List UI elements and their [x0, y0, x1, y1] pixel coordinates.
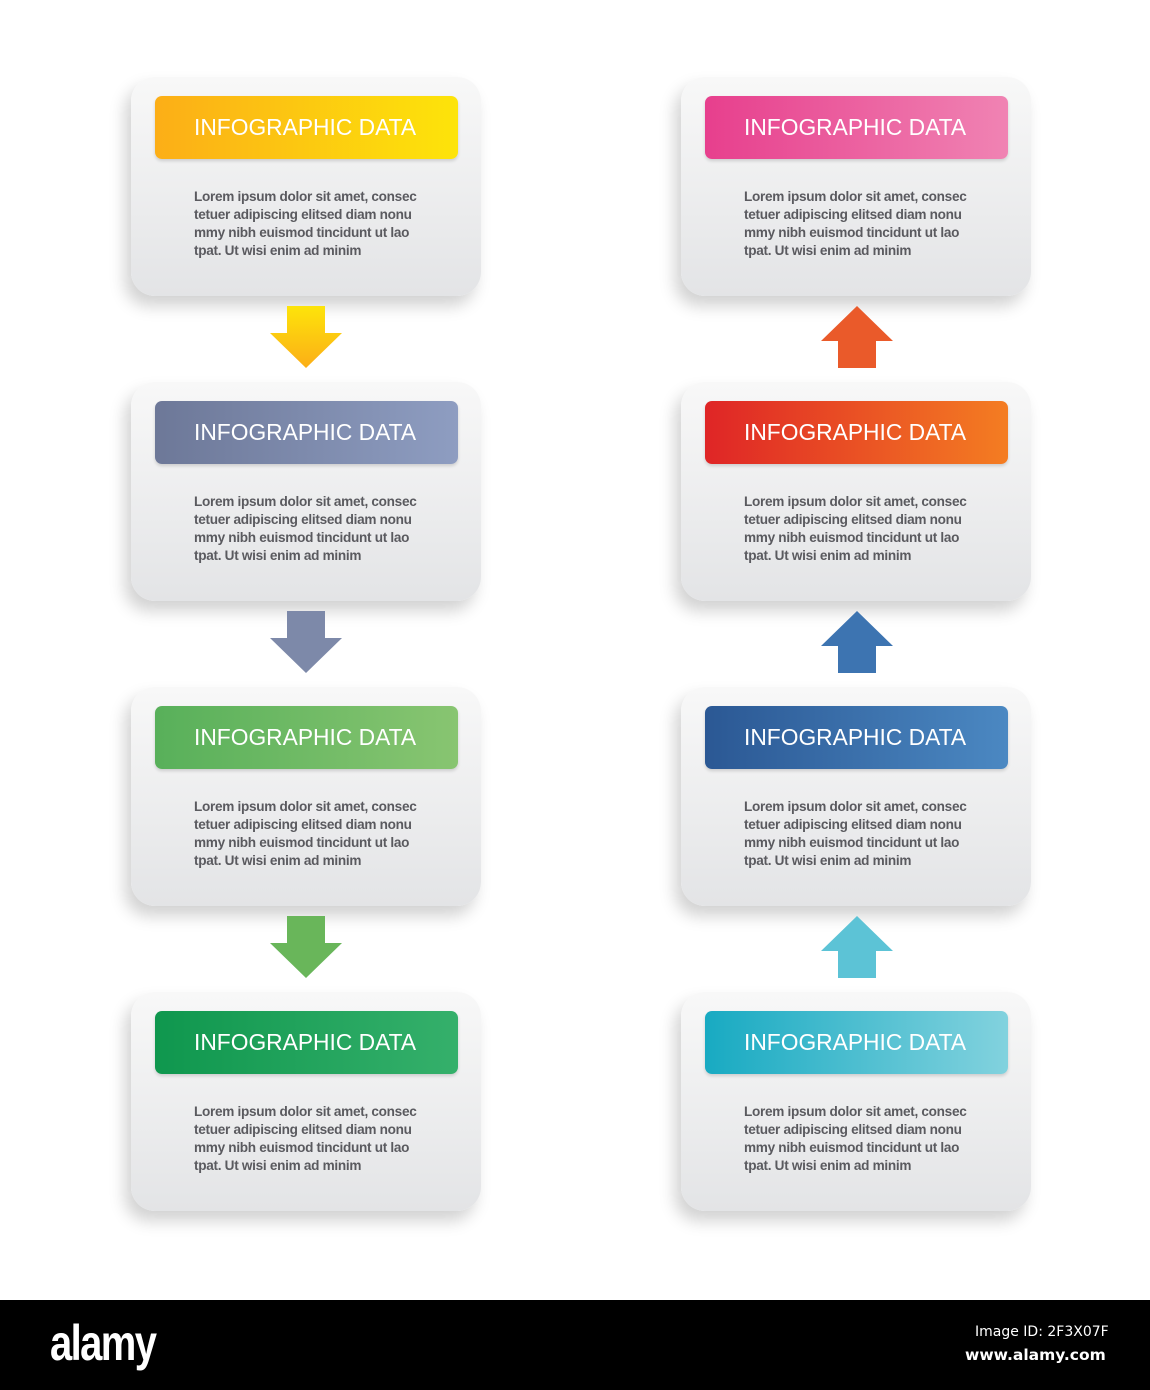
card: right 4: tetuer adipiscing elitsed diam nonu [744, 1122, 962, 1137]
card: right 1: tpat. Ut wisi enim ad minim [744, 243, 911, 258]
card: right 3: tetuer adipiscing elitsed diam nonu [744, 817, 962, 832]
card: left 4 [131, 992, 481, 1211]
card: left 2: tetuer adipiscing elitsed diam nonu [194, 512, 412, 527]
card: right 3 [681, 687, 1031, 906]
website text: www.alamy.com [965, 1346, 1106, 1364]
arrow: down green [270, 916, 342, 978]
card: right 1: mmy nibh euismod tincidunt ut lao [744, 225, 959, 240]
card: right 3: tpat. Ut wisi enim ad minim [744, 853, 911, 868]
card: left 2: tpat. Ut wisi enim ad minim [194, 548, 361, 563]
card: left 2 [131, 382, 481, 601]
card: left 1: tetuer adipiscing elitsed diam nonu [194, 207, 412, 222]
card: left 3: tetuer adipiscing elitsed diam nonu [194, 817, 412, 832]
card: left 4: mmy nibh euismod tincidunt ut lao [194, 1140, 409, 1155]
card: right 2 [681, 382, 1031, 601]
card: right 2: Lorem ipsum dolor sit amet, consec [744, 494, 966, 509]
card: right 3: INFOGRAPHIC DATA [744, 724, 966, 750]
card: left 4: INFOGRAPHIC DATA [194, 1029, 416, 1055]
arrow: up orange [821, 306, 893, 368]
card: right 4: Lorem ipsum dolor sit amet, consec [744, 1104, 966, 1119]
card: right 2: INFOGRAPHIC DATA [744, 419, 966, 445]
card: left 2: mmy nibh euismod tincidunt ut lao [194, 530, 409, 545]
card: right 3: mmy nibh euismod tincidunt ut lao [744, 835, 959, 850]
card: left 1: mmy nibh euismod tincidunt ut lao [194, 225, 409, 240]
card: left 1 [131, 77, 481, 296]
card: right 2: tetuer adipiscing elitsed diam nonu [744, 512, 962, 527]
card: right 1: INFOGRAPHIC DATA [744, 114, 966, 140]
card: right 4 [681, 992, 1031, 1211]
card: left 2: INFOGRAPHIC DATA [194, 419, 416, 445]
card: right 2: tpat. Ut wisi enim ad minim [744, 548, 911, 563]
card: right 4: mmy nibh euismod tincidunt ut lao [744, 1140, 959, 1155]
card: left 2: Lorem ipsum dolor sit amet, consec [194, 494, 416, 509]
card: right 3: Lorem ipsum dolor sit amet, consec [744, 799, 966, 814]
card: left 3: mmy nibh euismod tincidunt ut lao [194, 835, 409, 850]
image id text: Image ID: 2F3X07F [975, 1324, 1109, 1340]
card: left 1: INFOGRAPHIC DATA [194, 114, 416, 140]
card: left 4: Lorem ipsum dolor sit amet, consec [194, 1104, 416, 1119]
card: left 4: tpat. Ut wisi enim ad minim [194, 1158, 361, 1173]
card: right 4: tpat. Ut wisi enim ad minim [744, 1158, 911, 1173]
card: left 3: INFOGRAPHIC DATA [194, 724, 416, 750]
card: left 1: Lorem ipsum dolor sit amet, consec [194, 189, 416, 204]
footer bar [0, 1300, 1150, 1390]
card: right 1: tetuer adipiscing elitsed diam nonu [744, 207, 962, 222]
card: left 1: tpat. Ut wisi enim ad minim [194, 243, 361, 258]
logo: alamy: alamy [50, 1315, 155, 1371]
card: right 1 [681, 77, 1031, 296]
card: left 3: tpat. Ut wisi enim ad minim [194, 853, 361, 868]
card: left 4: tetuer adipiscing elitsed diam nonu [194, 1122, 412, 1137]
card: right 4: INFOGRAPHIC DATA [744, 1029, 966, 1055]
card: left 3: Lorem ipsum dolor sit amet, consec [194, 799, 416, 814]
arrow: up blue [821, 611, 893, 673]
card: right 1: Lorem ipsum dolor sit amet, consec [744, 189, 966, 204]
arrow: up cyan [821, 916, 893, 978]
card: left 3 [131, 687, 481, 906]
card: right 2: mmy nibh euismod tincidunt ut lao [744, 530, 959, 545]
arrow: down slate [270, 611, 342, 673]
arrow: down yellow [270, 306, 342, 368]
